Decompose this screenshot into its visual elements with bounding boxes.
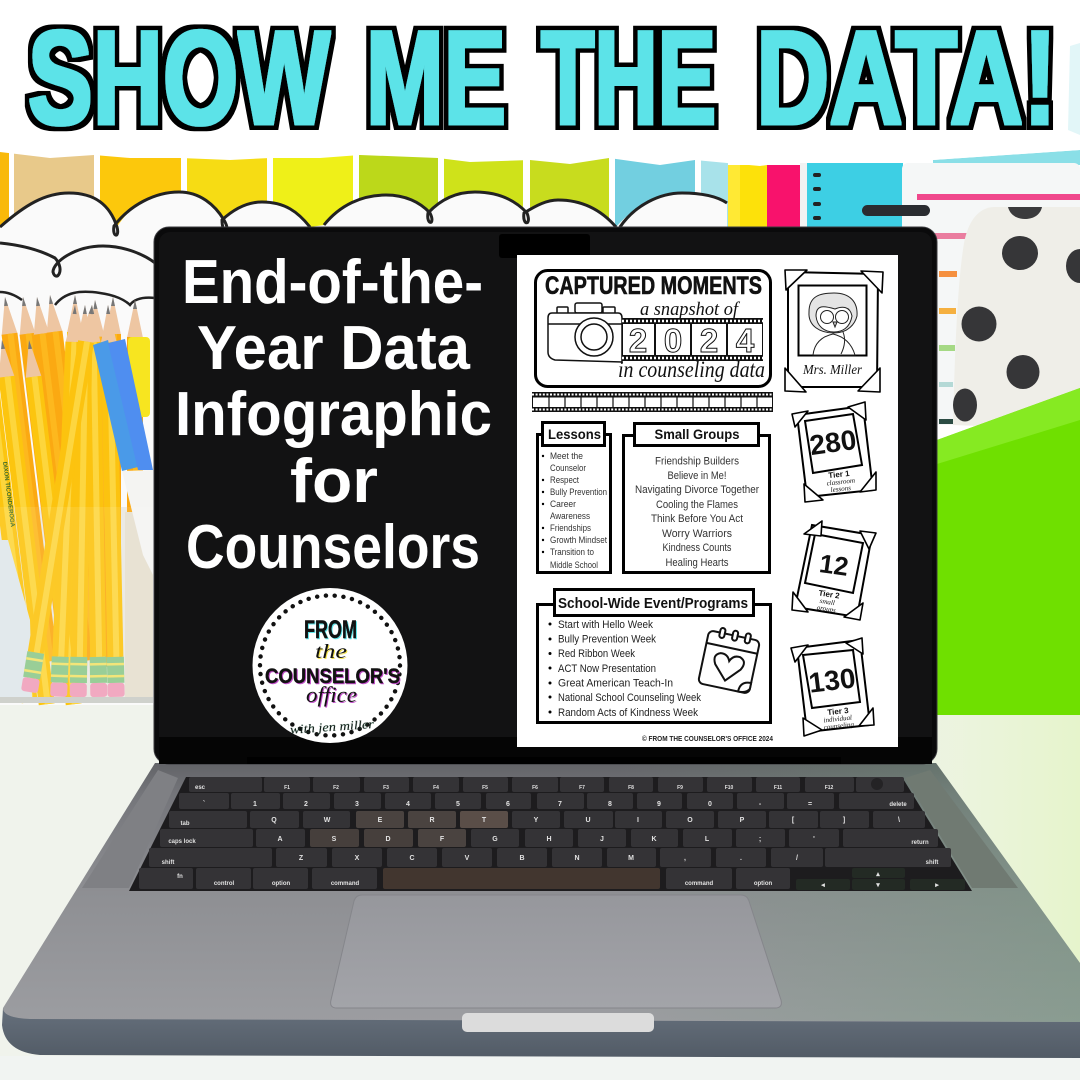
white brush band [0, 0, 1080, 166]
copyright: © FROM THE COUNSELOR'S OFFICE 2024 [642, 735, 773, 743]
keyboard keys: F2 [333, 785, 339, 791]
events list [548, 619, 701, 719]
lessons list: Middle School [550, 560, 598, 570]
keyboard keys: 9 [657, 801, 661, 808]
keyboard keys: F9 [677, 785, 683, 791]
character illustration [809, 293, 857, 355]
lessons list: Bully Prevention [550, 487, 607, 497]
small groups list: Think Before You Act [651, 513, 743, 525]
keyboard keys: ▾ [875, 882, 880, 889]
small groups list: Kindness Counts [662, 542, 732, 554]
logo badge: FROM [304, 616, 357, 644]
keyboard keys: P [740, 817, 745, 824]
keyboard keys: Q [271, 817, 277, 824]
events list: ACT Now Presentation [558, 663, 656, 675]
polaroid: tier 2 12 [792, 521, 876, 620]
keyboard keys: A [277, 836, 283, 843]
polaroid: tier 2 12: Tier 2 [818, 588, 841, 601]
infographic sheet [517, 255, 898, 747]
polaroid: tier 3 130: Tier 3 [827, 706, 850, 717]
logo badge: office [306, 682, 357, 707]
keyboard keys: H [546, 836, 552, 843]
keyboard keys: F8 [628, 785, 634, 791]
keyboard keys: tab [180, 821, 190, 827]
keyboard keys: 6 [506, 801, 510, 808]
film strip with year: 0 [664, 322, 682, 359]
keyboard keys: shift [162, 860, 174, 866]
lessons list: Meet the [550, 451, 583, 461]
panel: school-wide events [538, 590, 770, 722]
polaroid: tier 3 130: individual [823, 714, 852, 724]
dixon imprint: DIXON TICONDEROGA [1, 462, 15, 528]
events list: Bully Prevention Week [558, 634, 656, 646]
keyboard keys: ◂ [820, 882, 825, 889]
lessons list: Awareness [550, 511, 590, 521]
keyboard keys: 0 [708, 801, 712, 808]
keyboard keys: G [492, 836, 498, 843]
scalloped line art on white wall [0, 192, 727, 705]
logo badge [252, 588, 408, 743]
yellow highlighter [128, 337, 150, 417]
striped notebook [902, 150, 1080, 425]
panel: captured moments header [536, 270, 770, 386]
polaroid: tier 1 280: classroom [826, 477, 855, 487]
keyboard keys: F4 [433, 785, 439, 791]
film strip with year: 2 [700, 322, 718, 359]
keyboard keys: F11 [774, 785, 782, 791]
keyboard keys: F10 [725, 785, 734, 791]
lessons list: Respect [550, 475, 579, 485]
screen headline: Infographic [175, 380, 492, 449]
logo badge: the [315, 641, 347, 663]
keyboard keys: , [684, 855, 686, 862]
laptop screen [154, 227, 937, 764]
keyboard keys: option [272, 881, 290, 887]
keyboard keys: M [628, 855, 634, 862]
keyboard keys: C [409, 855, 415, 862]
title words: SHOW [28, 4, 330, 153]
keyboard keys: F12 [825, 785, 834, 791]
keyboard keys: S [332, 836, 337, 843]
polaroid: Mrs. Miller: Mrs. Miller [802, 363, 862, 378]
keyboard keys: ' [813, 836, 815, 843]
title words [28, 4, 1057, 153]
keyboard keys: = [808, 801, 812, 808]
polaroid: Mrs. Miller [785, 270, 883, 392]
keyboard keys: return [911, 840, 929, 846]
keyboard keys: V [465, 855, 470, 862]
right green reflection [620, 763, 1080, 1022]
cup backing [0, 507, 153, 703]
green folder [937, 388, 1080, 715]
screen headline [175, 248, 492, 582]
clear cup overlay [0, 507, 153, 703]
keyboard keys: E [378, 817, 383, 824]
keyboard keys: K [651, 836, 657, 843]
keyboard keys: ; [759, 836, 761, 843]
keyboard keys: ` [203, 801, 205, 808]
keyboard keys: F3 [383, 785, 389, 791]
keyboard keys: R [429, 817, 435, 824]
events list: Start with Hello Week [558, 619, 653, 631]
panel: captured moments header: a snapshot of [640, 299, 741, 320]
keyboard keys: command [685, 881, 714, 887]
keyboard keys: fn [177, 874, 183, 880]
keyboard keys: N [574, 855, 580, 862]
keyboard well [129, 777, 972, 891]
keyboard keys [139, 777, 965, 890]
keyboard keys: 4 [406, 801, 410, 808]
paint swatch strip [0, 150, 728, 240]
keyboard keys: command [331, 881, 360, 887]
events list: Random Acts of Kindness Week [558, 707, 698, 719]
icon: heart calendar [698, 625, 761, 694]
keyboard keys: 3 [355, 801, 359, 808]
lessons list: Transition to [550, 547, 594, 557]
pencil cup [0, 294, 153, 705]
faint cyan smear [1068, 43, 1080, 135]
lessons list: Growth Mindset [550, 535, 607, 545]
panel: captured moments header: CAPTURED MOMENTS [545, 272, 762, 300]
keyboard keys: control [214, 881, 234, 887]
polaroid: tier 1 280 [792, 402, 876, 502]
polaroid: tier 1 280: Tier 1 [828, 469, 851, 480]
keyboard keys: 8 [608, 801, 612, 808]
panel: small groups: Small Groups [654, 426, 740, 442]
keyboard keys: X [355, 855, 360, 862]
keyboard keys: ▸ [934, 882, 939, 889]
keyboard keys: B [519, 855, 525, 862]
front lip [2, 1008, 1080, 1058]
hinge notch [462, 1013, 654, 1032]
keyboard keys: caps lock [168, 839, 196, 845]
title words: ME [366, 4, 506, 153]
keyboard keys: . [740, 855, 742, 862]
polaroid: tier 2 12: groups [816, 604, 837, 615]
title [0, 0, 1080, 166]
panel: small groups [624, 424, 770, 572]
small groups list: Cooling the Flames [656, 499, 738, 511]
keyboard keys: F5 [482, 785, 488, 791]
film strip divider [532, 392, 773, 412]
keyboard keys: Z [299, 855, 304, 862]
screen headline: Counselors [186, 513, 480, 582]
back pencils [0, 294, 143, 705]
events list: Red Ribbon Week [558, 648, 635, 660]
keyboard keys: - [759, 801, 762, 808]
keyboard keys: O [687, 817, 693, 824]
events list: National School Counseling Week [558, 692, 701, 704]
laptop base [2, 763, 1080, 1058]
speaker grilles [82, 770, 178, 888]
lessons list [542, 451, 607, 570]
keyboard keys: 1 [253, 801, 257, 808]
keyboard keys: F1 [284, 785, 290, 791]
keyboard keys: delete [889, 802, 907, 808]
keyboard keys: ] [843, 817, 845, 824]
cup lower right contents [125, 512, 153, 698]
polaroid: tier 2 12: 12 [818, 548, 850, 582]
polaroid: tier 1 280: lessons [830, 484, 852, 494]
lessons list: Counselor [550, 463, 586, 473]
polaroid: tier 3 130: counseling [823, 720, 855, 732]
polaroid: tier 2 12: small [819, 597, 835, 607]
keyboard keys: 7 [558, 801, 562, 808]
front pencils [21, 304, 125, 697]
keyboard keys: I [637, 817, 639, 824]
polka dot pouch [953, 207, 1080, 430]
lessons list: Friendships [550, 523, 591, 533]
small groups list: Worry Warriors [662, 528, 732, 540]
keyboard keys: \ [898, 817, 900, 824]
keyboard keys: 2 [304, 801, 308, 808]
keyboard keys: [ [792, 817, 795, 824]
film strip with year [622, 318, 763, 361]
film strip with year: 2 [629, 322, 647, 359]
polaroid: tier 1 280: 280 [808, 424, 858, 461]
small groups list: Friendship Builders [655, 456, 739, 468]
keyboard keys: F [440, 836, 445, 843]
panel: school-wide events: School-Wide Event/Programs [558, 595, 748, 612]
keyboard keys: shift [926, 860, 938, 866]
small groups list [635, 456, 759, 569]
sticky notes and spiral notebook [728, 163, 903, 230]
palm rest deck [3, 763, 1080, 1022]
keyboard keys: option [754, 881, 772, 887]
lessons list: Career [550, 499, 576, 509]
keyboard keys: U [585, 817, 591, 824]
panel: lessons [538, 422, 610, 572]
panel: captured moments header: in counseling data [618, 357, 765, 382]
icon: camera [548, 303, 622, 362]
logo badge: COUNSELOR'S [265, 665, 400, 688]
screen headline: for [290, 447, 378, 516]
trackpad [331, 895, 781, 1008]
small groups list: Healing Hearts [666, 557, 729, 569]
screen headline: End-of-the- [182, 248, 483, 317]
keyboard keys: Y [534, 817, 539, 824]
keyboard keys: T [482, 817, 487, 824]
title words: THE [541, 4, 716, 153]
cup lower left contents [0, 540, 32, 697]
screen headline: Year Data [197, 314, 470, 383]
keyboard keys: D [385, 836, 391, 843]
keyboard keys: F7 [579, 785, 585, 791]
polaroid: tier 3 130 [791, 638, 874, 736]
panel: lessons: Lessons [548, 426, 601, 442]
binder ring [862, 205, 930, 216]
polaroid: tier 3 130: 130 [807, 662, 857, 699]
small groups list: Believe in Me! [668, 470, 726, 482]
keyboard keys: 5 [456, 801, 460, 808]
keyboard keys: L [705, 836, 710, 843]
blue markers [93, 339, 153, 471]
keyboard keys: / [796, 855, 798, 862]
logo badge: with jen miller [289, 716, 375, 737]
film strip with year: 4 [736, 322, 755, 359]
keyboard keys: F6 [532, 785, 538, 791]
keyboard keys: esc [195, 785, 206, 791]
small groups list: Navigating Divorce Together [635, 484, 759, 496]
keyboard keys: W [324, 817, 331, 824]
keyboard keys: ▴ [875, 871, 880, 878]
keyboard keys: J [600, 836, 604, 843]
white marker tips [122, 470, 153, 575]
events list: Great American Teach-In [558, 678, 673, 690]
